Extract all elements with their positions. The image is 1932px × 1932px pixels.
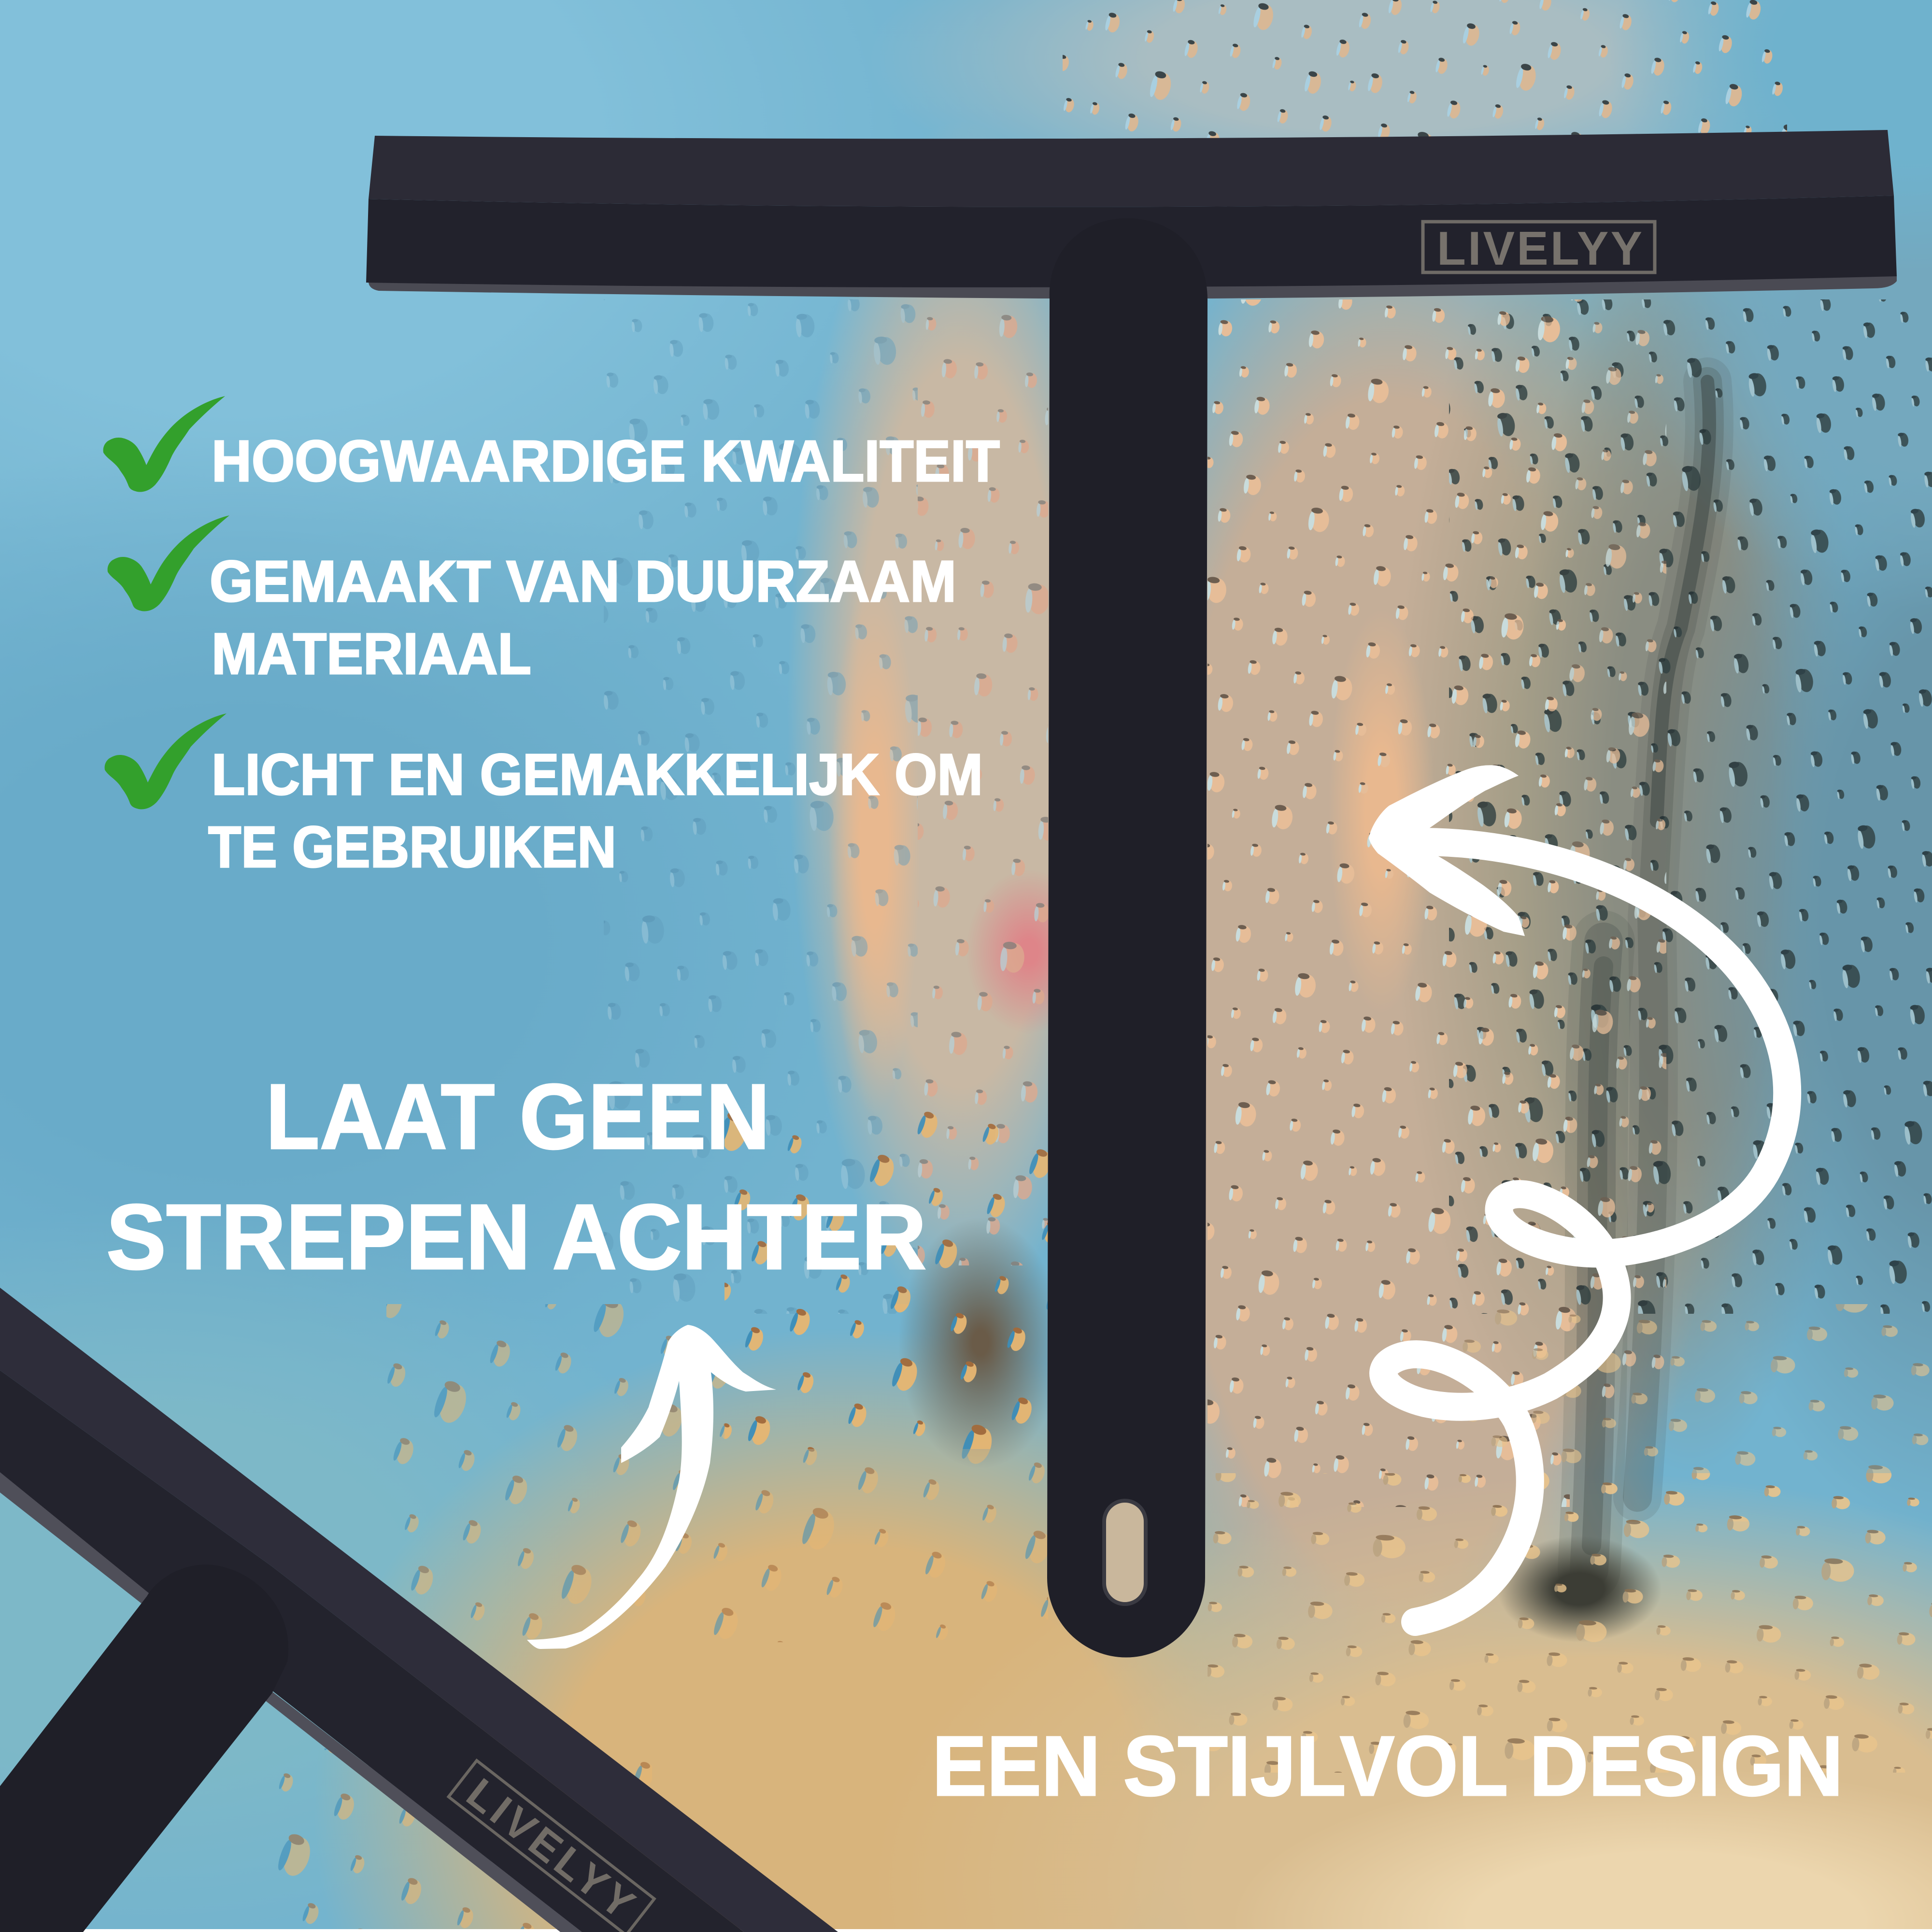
checklist text 2 [210, 548, 956, 686]
squeegee lower bar [366, 196, 1897, 287]
arrow curly shaft [1383, 842, 1787, 1622]
checklist text 2: MATERIAAL [212, 621, 531, 686]
droplets [1208, 299, 1570, 1507]
lower bar [0, 1370, 744, 1932]
arrow: large curly pointing at squeegee [1369, 765, 1787, 1622]
streak: dark water runs [1589, 382, 1709, 1570]
icon: green check 2 [108, 515, 229, 611]
checklist text 3 [208, 741, 983, 880]
squeegee: second product bottom-left [0, 1288, 838, 1932]
icon: green check 1 [103, 396, 225, 492]
checklist text 3: LICHT EN GEMAKKELIJK OM [212, 741, 983, 807]
upper bar [0, 1288, 838, 1932]
heading: laat geen strepen achter: LAAT GEEN [266, 1065, 770, 1168]
arrow curly head [1369, 765, 1525, 936]
checklist text 2: GEMAAKT VAN DUURZAAM [210, 548, 956, 614]
heading: laat geen strepen achter [106, 1065, 926, 1289]
handle hanging hole [1104, 1501, 1146, 1604]
checklist text 3: TE GEBRUIKEN [208, 814, 616, 880]
brand logo LIVELYY: LIVELYY [1437, 222, 1642, 275]
icon: green check 3 [105, 713, 227, 809]
arrow: small pointing up to heading [527, 1325, 776, 1649]
checklist text 1: HOOGWAARDIGE KWALITEIT [212, 428, 1000, 494]
squeegee upper bar [369, 130, 1894, 207]
handle [0, 1564, 288, 1932]
squeegee: main vertical product [366, 130, 1897, 1658]
squeegee blade lip [369, 275, 1897, 298]
caption: een stijlvol design: EEN STIJLVOL DESIGN [932, 1719, 1843, 1814]
brand logo LIVELYY rotated: LIVELYY [458, 1769, 644, 1928]
checklist [103, 396, 1000, 880]
heading: laat geen strepen achter: STREPEN ACHTER [106, 1185, 926, 1289]
blade lip [0, 1468, 584, 1932]
squeegee handle [1047, 218, 1208, 1658]
